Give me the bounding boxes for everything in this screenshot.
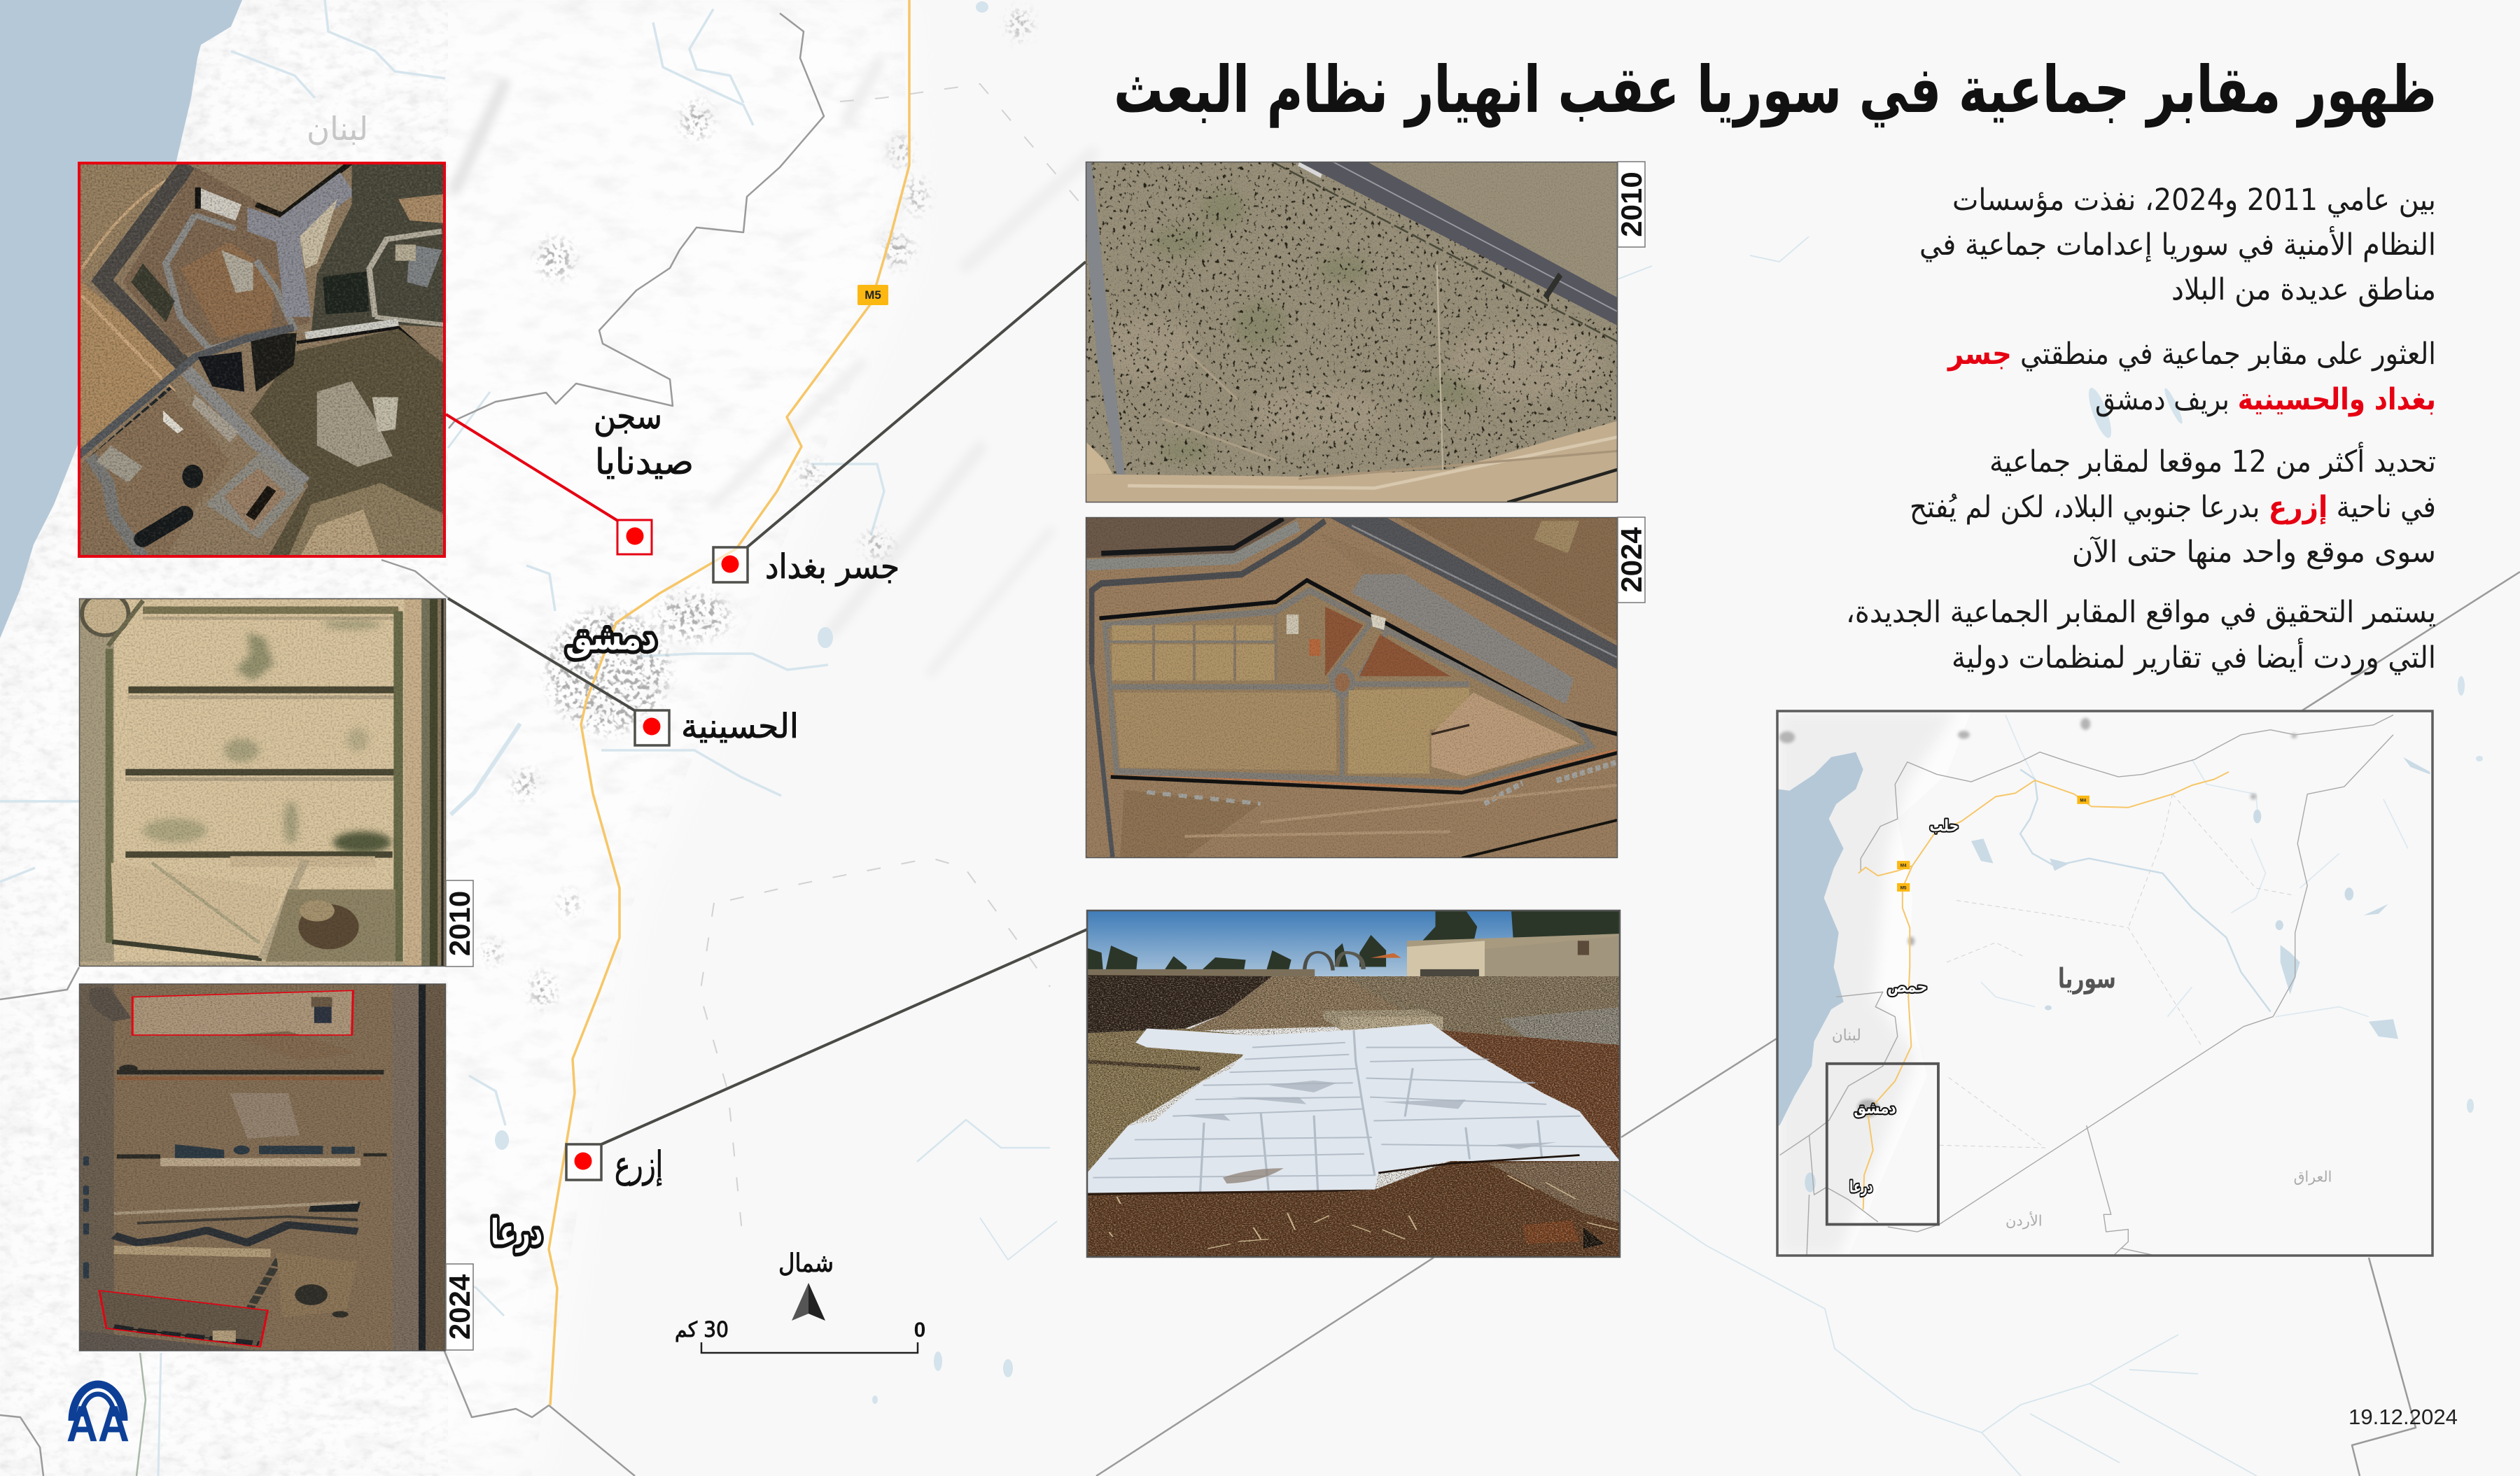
- sea: [0, 0, 242, 638]
- road M5: [549, 0, 909, 1405]
- inset locator map of Syria: حمص: [1887, 978, 1928, 996]
- location marker: Jisr Baghdad: [713, 547, 748, 582]
- text block: paragraph 1: النظام الأمنية في سوريا إعدامات جماعية في: [1919, 225, 2436, 262]
- inset locator map of Syria: حلب: [1929, 817, 1959, 836]
- scale bar: [675, 1318, 925, 1353]
- callout line: Jisr Baghdad: [746, 262, 1086, 548]
- inset locator map of Syria: M4: [1900, 864, 1907, 869]
- urban areas: [484, 10, 1030, 1005]
- inset locator map of Syria: M5: [1900, 885, 1907, 890]
- callout line: Izra: [600, 929, 1087, 1145]
- red highlight: bottom trench: [99, 1291, 267, 1347]
- map label: Saydnaya prison: سجن: [594, 396, 662, 437]
- map label: Daraa: درعا: [491, 1212, 542, 1253]
- text block: paragraph 4: التي وردت أيضا في تقارير لمنظمات دولية: [1952, 638, 2436, 675]
- map label: Saydnaya prison: [594, 396, 694, 482]
- inset locator map of Syria: الأردن: [2005, 1212, 2043, 1230]
- panel: photo of body bags: [1087, 911, 1620, 1257]
- map label: Jisr Baghdad: جسر بغداد: [765, 547, 899, 586]
- north arrow: [778, 1249, 834, 1321]
- text block: paragraph 1: مناطق عديدة من البلاد: [2171, 272, 2436, 307]
- red highlight: top trench: [132, 990, 353, 1035]
- label: year 2010 right: 2010: [1615, 171, 1648, 237]
- map label: Izra: إزرع: [615, 1144, 663, 1186]
- map label: Saydnaya prison: صيدنايا: [595, 442, 694, 482]
- label: year 2024 right: 2024: [1615, 527, 1648, 593]
- inset locator map of Syria: M4: [2080, 798, 2087, 803]
- label: year 2010 left: 2010: [443, 891, 476, 956]
- north arrow: شمال: [778, 1249, 834, 1278]
- panel: left satellite image 2010: [79, 593, 446, 966]
- text block: paragraph 4: [1846, 595, 2436, 675]
- panel: right satellite image 2024: [1086, 517, 1618, 858]
- inset locator map of Syria: سوريا: [2058, 963, 2116, 995]
- inset locator map of Syria: [1777, 711, 2432, 1256]
- road badge M5: M5: [864, 288, 881, 302]
- location marker: Saydnaya: [617, 520, 652, 554]
- text block: paragraph 3: سوى موقع واحد منها حتى الآن: [2072, 535, 2436, 570]
- date: 19.12.2024: [2348, 1405, 2458, 1429]
- inset locator map of Syria: لبنان: [1832, 1027, 1861, 1045]
- text block: paragraph 2: بغداد والحسينية بريف دمشق: [2095, 382, 2436, 417]
- location marker: Izra: [566, 1144, 601, 1180]
- panel: Saydnaya prison satellite image: [78, 162, 446, 558]
- map label: Lebanon: لبنان: [307, 110, 368, 148]
- callout line: Saydnaya: [446, 414, 619, 521]
- text block: paragraph 3: في ناحية إزرع بدرعا جنوبي البلاد، لكن لم يُفتح: [1910, 490, 2436, 525]
- text block: paragraph 2: [1947, 337, 2436, 417]
- text block: paragraph 1: [1919, 183, 2436, 307]
- panel: left satellite image 2024: [79, 984, 446, 1351]
- location marker: Husseiniya: [635, 710, 669, 745]
- logo: Anadolu Agency: AA: [66, 1396, 130, 1452]
- callout line: Husseiniya: [448, 598, 636, 711]
- text block: paragraph 4: يستمر التحقيق في مواقع المقابر الجماعية الجديدة،: [1846, 595, 2436, 630]
- inset locator map of Syria: دمشق: [1854, 1099, 1896, 1118]
- label: year 2024 left: 2024: [443, 1274, 476, 1340]
- inset locator map of Syria: درعا: [1849, 1178, 1873, 1197]
- map label: Damascus: دمشق: [566, 617, 657, 659]
- inset locator map of Syria: العراق: [2294, 1168, 2332, 1186]
- panel: right satellite image 2010: [1086, 162, 1618, 502]
- road badge M5: [858, 285, 888, 305]
- text block: paragraph 1: بين عامي 2011 و2024، نفذت مؤسسات: [1952, 183, 2436, 218]
- map label: Husseiniya: الحسينية: [681, 707, 799, 746]
- scale bar: 30 كم: [675, 1318, 729, 1342]
- text block: paragraph 3: [1910, 442, 2436, 570]
- scale bar: 0: [914, 1319, 925, 1342]
- locator rectangle: [1827, 1064, 1938, 1224]
- text block: paragraph 2: العثور على مقابر جماعية في منطقتي جسر: [1947, 337, 2436, 372]
- text block: paragraph 3: تحديد أكثر من 12 موقعا لمقابر جماعية: [1989, 442, 2436, 479]
